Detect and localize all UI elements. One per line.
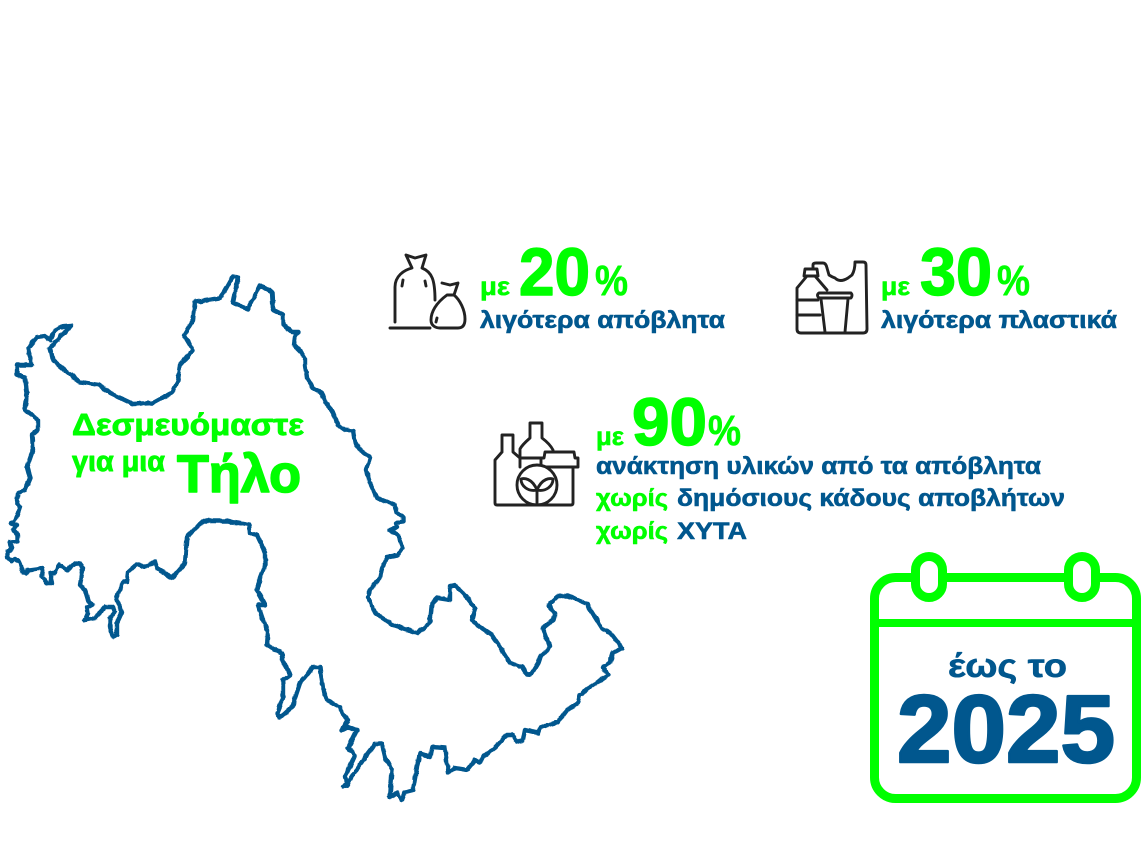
icon: bottles and cup with sprout	[495, 423, 578, 505]
stat: 90% material recovery, no public bins, no landfill: ΧΥΤΑ	[677, 518, 747, 545]
stat: 90% material recovery, no public bins, no landfill: δημόσιους κάδους αποβλήτων	[677, 485, 1065, 512]
heading: commitment to Tilos: Τήλο	[177, 445, 301, 504]
stat: 90% material recovery, no public bins, no landfill: χωρίς	[596, 485, 668, 512]
heading: commitment to Tilos: Δεσμευόμαστε	[72, 407, 304, 442]
stat: 30% less plastics: 30	[920, 235, 992, 310]
stat: 30% less plastics	[881, 235, 1117, 334]
stat: 20% less waste: %	[595, 257, 628, 305]
heading: commitment to Tilos: για μια	[72, 446, 165, 478]
calendar: by 2025: 2025	[897, 676, 1115, 783]
calendar: by 2025	[874, 556, 1137, 798]
stat: 90% material recovery, no public bins, no landfill: %	[708, 407, 741, 455]
stat: 30% less plastics: λιγότερα πλαστικά	[881, 307, 1117, 334]
stat: 90% material recovery, no public bins, no landfill: με	[596, 421, 624, 451]
stat: 90% material recovery, no public bins, no landfill: 90	[632, 385, 707, 460]
stat: 20% less waste: 20	[519, 235, 590, 310]
map: outline of Tilos island	[7, 276, 622, 800]
icon: waste bags	[390, 255, 465, 328]
heading: commitment to Tilos	[72, 407, 304, 504]
stat: 20% less waste: λιγότερα απόβλητα	[480, 307, 725, 334]
stat: 20% less waste: με	[480, 271, 510, 301]
stat: 90% material recovery, no public bins, no landfill: ανάκτηση υλικών από τα απόβλητα	[596, 453, 1041, 480]
icon: plastics	[797, 262, 867, 333]
stat: 90% material recovery, no public bins, no landfill	[596, 385, 1065, 545]
calendar: by 2025: έως το	[948, 647, 1067, 684]
stat: 30% less plastics: με	[881, 271, 910, 301]
stat: 30% less plastics: %	[997, 257, 1030, 305]
stat: 90% material recovery, no public bins, no landfill: χωρίς	[596, 518, 668, 545]
stat: 20% less waste	[480, 235, 725, 334]
